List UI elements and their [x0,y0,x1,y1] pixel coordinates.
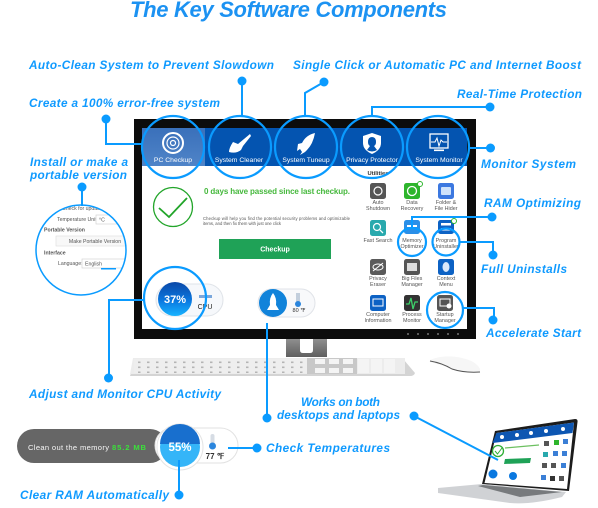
icon: Memory Optimizer: Memory [402,238,422,244]
label: real-time protection: Real-Time Protection [457,87,582,101]
mouse [430,356,480,372]
settings magnifier circle: °C [99,218,105,224]
bezel buttons [407,333,459,335]
laptop tab icons [500,427,565,439]
settings magnifier circle [36,205,128,295]
icon: Auto Shutdown: Auto [372,200,384,206]
CPU widget: CPU [198,304,212,311]
icon: Startup Manager [434,295,456,324]
label: desktops and laptops: Works on both [301,395,380,409]
feature circle: PC Checkup [142,116,204,178]
RAM gauge 55%: 55% [168,442,192,454]
feature circle: Program Uninstaller [432,228,460,256]
laptop icons [541,439,568,481]
utilities heading: Utilities [368,171,388,177]
monitor screen [142,128,467,329]
icon: Computer Information [365,295,391,324]
icon: Folder & File Hider: File Hider [434,206,458,212]
temperature pill [155,428,238,463]
laptop [438,419,578,503]
icon: Big Files Manager [401,259,423,288]
checkup description [203,216,351,226]
icon: Context Menu: Context [437,276,456,282]
tab bar [142,128,467,166]
label: single click: Single Click or Automatic PC and Internet Boost [293,58,582,72]
laptop button [504,458,531,464]
laptop base [438,484,566,503]
RAM temperature widget [17,424,238,470]
connector: portable version [78,182,86,206]
connector: monitor system [470,144,495,152]
memory message pill [17,429,167,463]
utilities panel [363,171,459,324]
connector: accelerate start [463,308,498,324]
icon: Program Uninstaller: Program [436,238,457,244]
laptop widgets [488,470,517,480]
feature circle: System Monitor [407,116,469,178]
connector: desktops and laptops [262,323,272,422]
tab: System Monitor: System Monitor [415,157,463,164]
icon: Big Files Manager: Manager [401,282,423,288]
icon: Process Monitor: Monitor [403,318,421,324]
label: portable version: portable version [29,168,127,182]
tab: PC Checkup: PC Checkup [154,157,192,164]
checkup description: Checkup will help you find the potential security problems and optimizable [203,216,351,221]
laptop status text [505,445,539,448]
connector: laptop [410,412,498,460]
checkup description: items, and then fix them with just one click [203,221,282,226]
laptop screen [484,422,574,489]
icon: Privacy Eraser: Eraser [370,282,386,288]
laptop header [492,422,574,443]
label: full uninstalls: Full Uninstalls [481,262,567,276]
icon: Program Uninstaller: Uninstaller [433,244,459,250]
label: monitor system: Monitor System [481,157,576,171]
settings magnifier circle: Interface [44,250,66,256]
icon: Folder & File Hider: Folder & [436,200,457,206]
feature circle: System Cleaner [209,116,271,178]
connector: clear RAM [174,460,184,500]
checkup button: Checkup [260,246,290,254]
icon: Process Monitor: Process [402,312,422,318]
feature circle: Privacy Protector [341,116,403,178]
monitor bezel [134,119,476,339]
connector: error-free [102,114,142,144]
icon: Fast Search: Fast Search [363,238,393,244]
checkup button [219,239,331,259]
label: desktops and laptops: desktops and laptops [277,408,400,422]
label: CPU activity: Adjust and Monitor CPU Activity [28,387,222,401]
tab: System Monitor [415,134,463,164]
icon: Program Uninstaller [433,218,459,250]
checkup check icon [154,188,192,226]
feature circle: Memory Optimizer [398,228,426,256]
connector: full uninstalls [459,242,498,260]
label: clear RAM: Clear RAM Automatically [20,488,170,502]
icon: Auto Shutdown [366,183,390,212]
tab: Privacy Protector: Privacy Protector [346,157,399,164]
connector: real-time protection [372,102,494,116]
label: accelerate start: Accelerate Start [485,326,582,340]
icon: Data Recovery: Data [406,200,418,206]
feature circle: Startup Manager [427,292,463,328]
active tab [142,128,205,166]
icon: Memory Optimizer: Optimizer [400,244,424,250]
CPU widget: 37% [164,294,186,306]
label: RAM optimizing: RAM Optimizing [484,196,581,210]
label: error-free system: Create a 100% error-free system [29,96,220,110]
icon: Computer Information: Information [365,318,391,324]
icon: Context Menu: Menu [439,282,453,288]
icon: Privacy Eraser: Privacy [369,276,387,282]
rocket temperature widget [258,289,315,317]
settings magnifier circle: Temperature Unit: [57,217,98,223]
label: desktops and laptops [277,395,400,422]
icon: Data Recovery [401,182,424,212]
connector: single click [305,78,328,117]
icon: Startup Manager: Manager [434,318,456,324]
settings magnifier circle: Make Portable Version [69,239,121,245]
settings magnifier circle: Check for updates: [62,206,106,212]
icon: Big Files Manager: Big Files [402,276,423,282]
tab: System Cleaner: System Cleaner [215,157,264,164]
rocket temperature widget: 80 ℉ [293,308,306,314]
laptop check icon [492,446,504,456]
tab: System Tuneup: System Tuneup [282,157,330,164]
connector: RAM optimizing [412,212,496,228]
connector: CPU activity [104,300,144,382]
keyboard [130,358,415,376]
icon: Auto Shutdown: Shutdown [366,206,390,212]
tab: System Cleaner [215,134,264,164]
settings magnifier circle: English [85,262,102,268]
icon: Memory Optimizer [400,220,424,250]
CPU widget [156,282,223,316]
tab: System Tuneup [282,133,330,164]
icon: Process Monitor [402,295,422,324]
RAM gauge 55% [157,424,203,470]
feature circle: CPU [144,267,206,329]
temperature pill: 77 ℉ [206,452,225,461]
tab: PC Checkup [154,133,192,164]
connector: check temperatures [228,444,262,452]
monitor [134,119,476,357]
settings magnifier circle: Portable Version [44,228,85,234]
icon: Fast Search [363,220,393,244]
connector: auto-clean [238,76,246,116]
icon: Context Menu [437,259,456,288]
feature circle: System Tuneup [275,116,337,178]
settings magnifier circle: Language: [58,261,83,267]
icon: Folder & File Hider [434,183,458,212]
memory message pill: 85.2 MB [112,443,147,452]
checkup status heading: 0 days have passed since last checkup. [204,187,350,196]
laptop lid [482,419,578,491]
label: check temperatures: Check Temperatures [266,441,390,455]
label: auto-clean: Auto-Clean System to Prevent Slowdown [28,58,274,72]
memory message pill: Clean out the memory [28,443,109,452]
label: portable version: Install or make a [30,155,128,169]
tab: Privacy Protector [346,133,399,164]
icon: Data Recovery: Recovery [401,206,424,212]
icon: Startup Manager: Startup [436,312,454,318]
label: portable version [29,155,128,182]
monitor stand [286,339,327,357]
icon: Computer Information: Computer [366,312,390,318]
icon: Privacy Eraser [369,259,387,288]
